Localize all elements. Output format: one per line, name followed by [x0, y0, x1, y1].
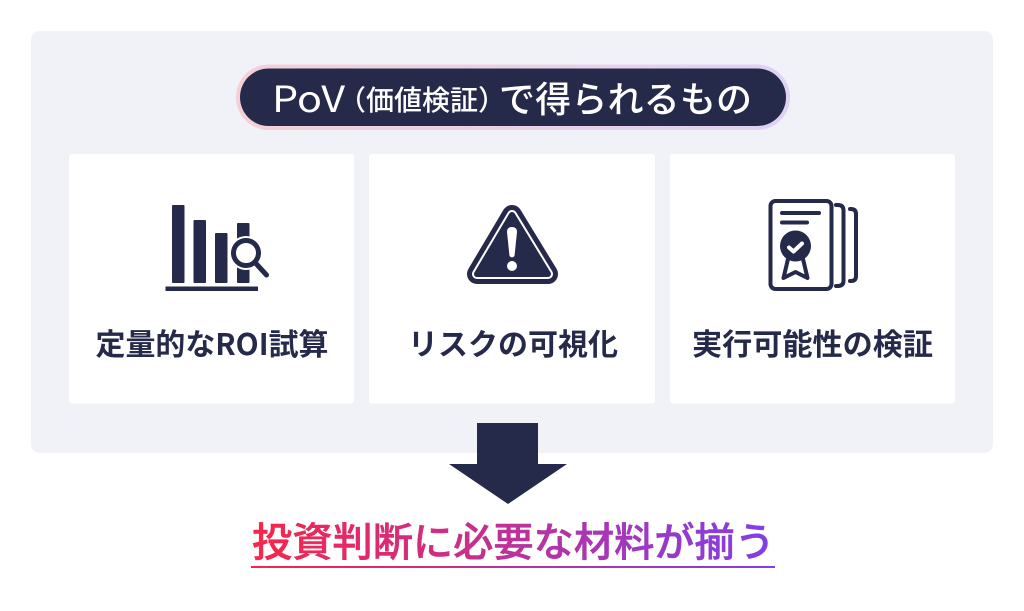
icon: warning triangle [477, 215, 548, 274]
conclusion text: 投資判断に必要な材料が揃う [252, 510, 775, 568]
panel: risk card [369, 154, 655, 404]
icon: bar chart with magnifier [166, 205, 266, 291]
gradient underline [251, 566, 775, 568]
card label: 定量的なROI試算 [96, 320, 328, 364]
card label: 実行可能性の検証 [692, 320, 933, 364]
title pill [236, 64, 790, 130]
title text: （価値検証） [338, 79, 506, 119]
panel: ROI card [69, 154, 354, 404]
icon: certificate documents [770, 201, 856, 289]
panel: background [31, 31, 993, 453]
title text: で得られるもの [499, 71, 752, 123]
arrow: down [449, 423, 567, 504]
title text [272, 71, 752, 123]
title text: PoV [272, 71, 345, 123]
card label: リスクの可視化 [408, 320, 618, 364]
panel: feasibility card [670, 154, 955, 404]
